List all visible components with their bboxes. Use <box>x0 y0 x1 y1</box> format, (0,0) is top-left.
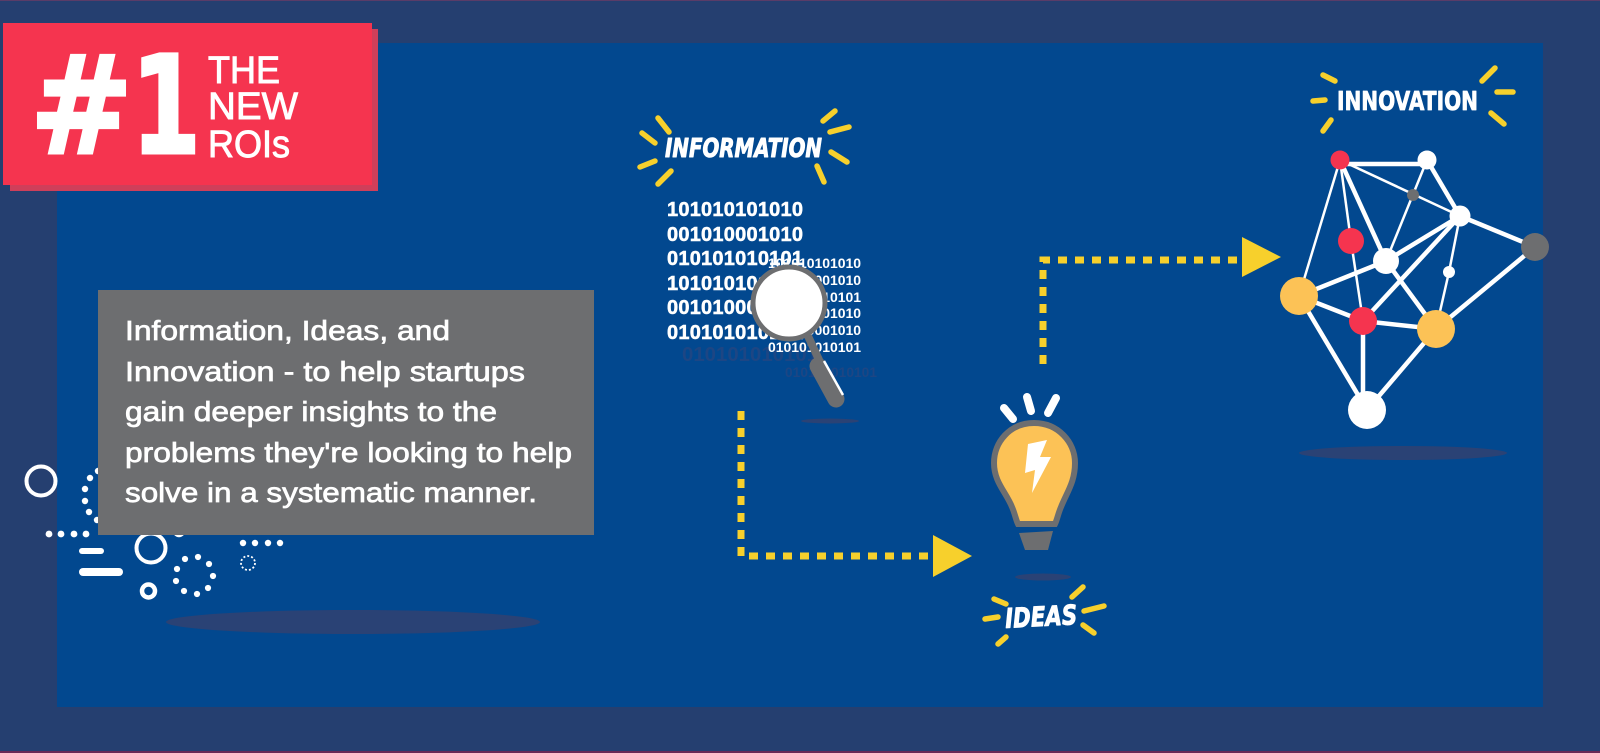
binary code block: small: 001010001010 <box>768 322 861 338</box>
heading: the new ROIs: THE <box>208 50 280 92</box>
decorative circles and dots <box>26 466 283 598</box>
shadow under network <box>1299 446 1507 460</box>
heading: the new ROIs: ROIs <box>208 124 290 166</box>
binary shadow text: 010101010101 <box>682 344 818 366</box>
card body text: Information, Ideas, and <box>125 315 450 346</box>
text card <box>98 290 594 535</box>
binary code block: large: 101010101010 <box>667 273 803 295</box>
label: information: INFORMATION <box>665 134 822 164</box>
binary code block: large: 101010101010 <box>667 199 803 221</box>
card body text: Innovation - to help startups <box>125 356 525 387</box>
binary code block: large: 001010001010 <box>667 297 803 319</box>
label: innovation <box>1313 68 1513 131</box>
shadow under text card <box>166 610 540 634</box>
label: ideas: IDEAS <box>1004 600 1078 635</box>
heading: the new ROIs <box>208 50 298 166</box>
icon: light bulb <box>994 397 1075 550</box>
card body text <box>125 315 572 508</box>
binary code block: large: 010101010101 <box>667 248 803 270</box>
heading: #1: # <box>30 28 133 186</box>
card body text: gain deeper insights to the <box>125 396 497 427</box>
shadow under magnifying glass <box>801 418 859 424</box>
card body text: solve in a systematic manner. <box>125 477 537 508</box>
heading: the new ROIs: NEW <box>208 86 298 128</box>
binary code block: large <box>667 199 803 344</box>
label: innovation: INNOVATION <box>1337 87 1478 117</box>
label: information <box>640 111 849 184</box>
heading: #1: 1 <box>131 28 201 186</box>
binary shadow text: 010101010101 <box>785 364 877 380</box>
binary code block: small: 101010101010 <box>768 255 861 271</box>
dashed arrow: ideas to innovation <box>1043 237 1281 364</box>
binary code block: small: 010101010101 <box>768 289 861 305</box>
binary code block: small <box>768 255 861 355</box>
title badge <box>3 23 378 191</box>
binary code block: small: 001010001010 <box>768 272 861 288</box>
label: ideas <box>985 587 1104 644</box>
dashed arrow: information to ideas <box>741 411 972 577</box>
card body text: problems they're looking to help <box>125 437 572 468</box>
binary shadow text <box>682 344 877 380</box>
binary code block: large: 001010001010 <box>667 224 803 246</box>
binary code block: small: 101010101010 <box>768 305 861 321</box>
icon: magnifying glass <box>753 267 843 399</box>
binary code block: large: 010101010101 <box>667 322 803 344</box>
network diagram <box>1280 150 1549 429</box>
shadow under bulb <box>1015 574 1071 580</box>
network nodes <box>1280 150 1549 429</box>
binary code block: small: 010101010101 <box>768 339 861 355</box>
heading: #1 <box>30 28 201 186</box>
